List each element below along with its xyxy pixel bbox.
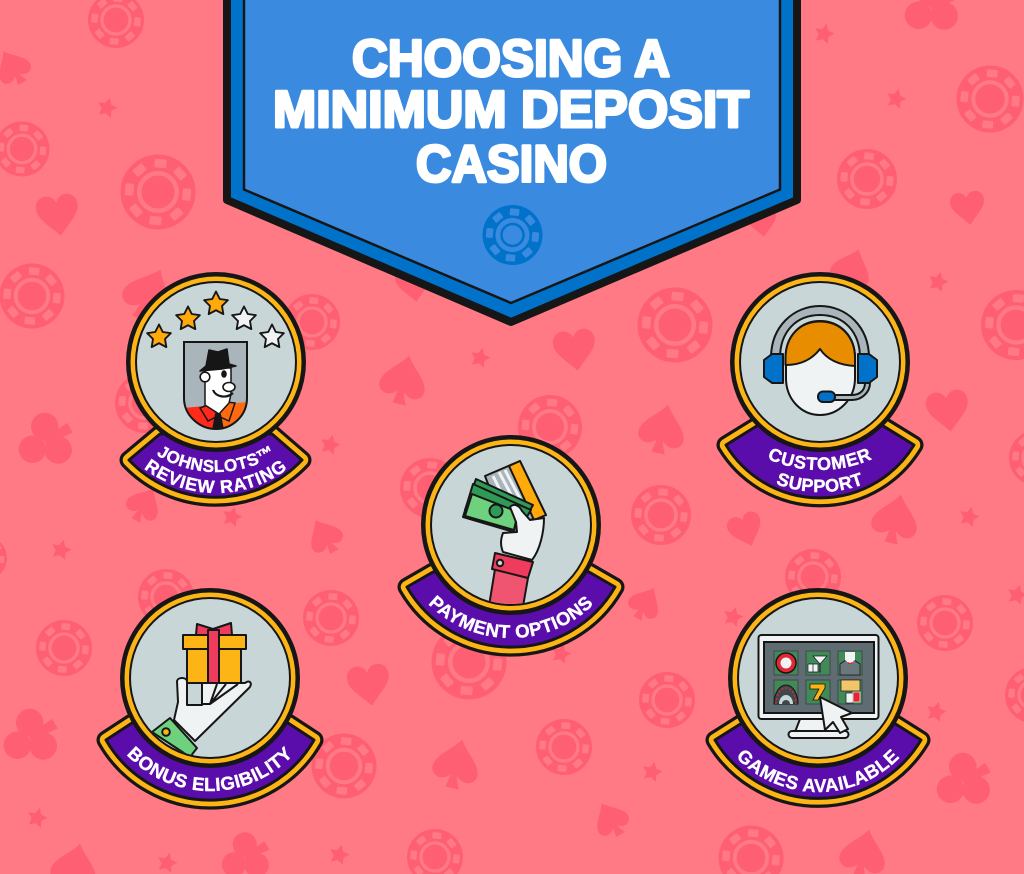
icon: five stars <box>147 292 284 347</box>
label: games available: GAMES AVAILABLE <box>738 748 900 792</box>
title: MINIMUM DEPOSIT <box>273 81 749 139</box>
icon: support agent with headset <box>764 306 877 415</box>
badge: games available <box>706 588 930 808</box>
title banner <box>227 0 797 322</box>
title: CHOOSING A <box>352 30 670 88</box>
medallion <box>421 435 601 615</box>
ribbon <box>715 723 921 798</box>
ribbon <box>106 723 314 800</box>
icon: computer monitor with game tiles <box>758 635 878 738</box>
icon: hand offering a gift box <box>152 623 251 757</box>
badge: bonus eligibility <box>96 588 324 810</box>
badge: customer support <box>716 272 924 508</box>
label: JohnSlots review rating: REVIEW RATING <box>144 458 286 494</box>
label: JohnSlots review rating: JOHNSLOTS™ <box>158 446 271 472</box>
label: bonus eligibility: BONUS ELIGIBILITY <box>126 746 290 792</box>
label: customer support: CUSTOMER <box>769 448 872 470</box>
medallion <box>126 272 306 452</box>
medallion <box>728 588 908 768</box>
ribbon <box>726 424 914 498</box>
ribbon <box>407 572 615 647</box>
badge: JohnSlots review rating <box>120 272 312 507</box>
label: customer support: SUPPORT <box>776 472 861 492</box>
label: payment options: PAYMENT OPTIONS <box>428 595 592 638</box>
badge: payment options <box>398 435 624 657</box>
icon: hand holding cash and card <box>463 461 546 612</box>
title: CASINO <box>416 136 607 194</box>
title <box>273 30 749 194</box>
icon: banner chip <box>482 205 542 265</box>
medallion <box>120 588 300 768</box>
medallion <box>730 272 910 452</box>
label: customer support <box>769 448 872 492</box>
ribbon <box>129 434 302 497</box>
icon: JohnSlots mascot shield <box>184 342 247 430</box>
